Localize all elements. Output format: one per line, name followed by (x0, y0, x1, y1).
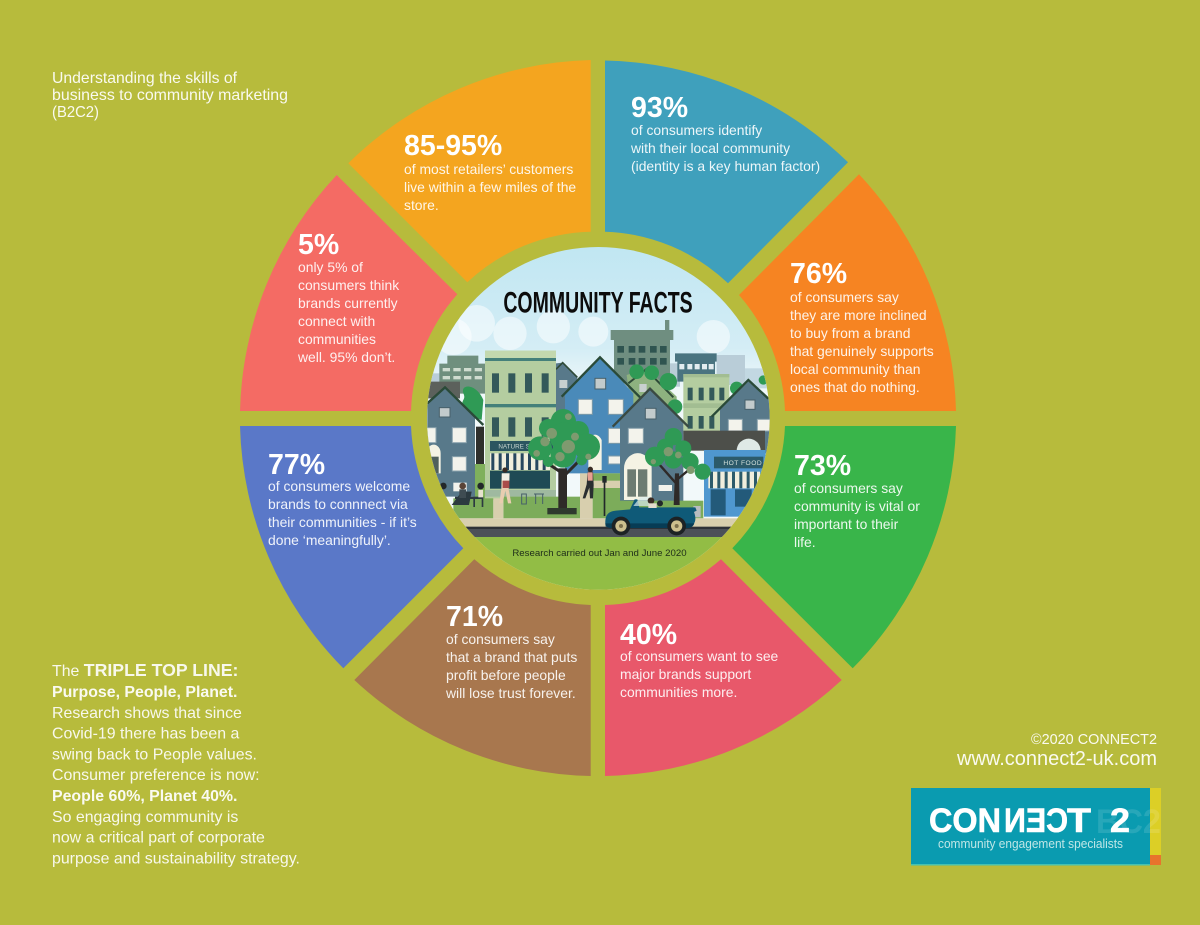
triple top line text block: now a critical part of corporate (52, 830, 265, 846)
panel: 76% inclined to buy: local community than (790, 361, 920, 377)
panel: 76% inclined to buy: to buy from a brand (790, 325, 910, 341)
panel: 71% lose trust: that a brand that puts (446, 649, 577, 665)
triple top line text block: People 60%, Planet 40%. (52, 788, 237, 805)
panel: 71% lose trust: profit before people (446, 667, 566, 683)
triple top line text block: swing back to People values. (52, 746, 257, 764)
panel: 5% connect well: only 5% of (298, 259, 363, 275)
logo: connect2: 2 (1110, 802, 1130, 840)
central town illustration (420, 240, 780, 600)
panel: 76% inclined to buy: that genuinely supports (790, 343, 934, 359)
panel: 76% inclined to buy: of consumers say (790, 289, 899, 305)
triple top line text block: Consumer preference is now: (52, 767, 260, 784)
panel: 73% vital: life. (794, 534, 816, 550)
panel: 71% lose trust: will lose trust forever. (445, 685, 576, 701)
intro text: Understanding the skills of (52, 70, 238, 87)
panel: 40% support communities: 40% (620, 619, 677, 651)
logo: connect2: BC2 (1096, 803, 1161, 841)
research note: Research carried out Jan and June 2020 (512, 548, 687, 558)
panel: 5% connect well: well. 95% don’t. (297, 349, 395, 365)
panel: 73% vital: 73% (794, 450, 851, 482)
triple top line text block: The TRIPLE TOP LINE: (52, 660, 238, 680)
panel: 40% support communities (605, 559, 842, 776)
logo: connect2: CEN (1004, 802, 1068, 840)
panel: 85-95% retailers: of most retailers’ customers (404, 161, 573, 177)
logo: connect2: T (1067, 802, 1091, 840)
panel: 93% identity: (identity is a key human factor) (631, 158, 820, 174)
intro text: business to community marketing (52, 87, 288, 104)
logo: connect2: community engagement specialists (938, 837, 1123, 851)
panel: 5% connect well: consumers think (298, 277, 399, 293)
panel: 40% support communities: of consumers want to see (620, 648, 779, 664)
panel: 5% connect well: connect with (298, 313, 375, 329)
panel: 85-95% retailers: 85-95% (404, 130, 502, 162)
panel: 93% identity: 93% (631, 92, 688, 124)
panel: 73% vital (732, 426, 956, 668)
central town illustration: NATURE S (498, 444, 530, 451)
triple top line text block: Research shows that since (52, 705, 242, 722)
panel: 40% support communities: major brands support (620, 666, 751, 682)
panel: 93% identity: with their local community (630, 140, 790, 156)
panel: 85-95% retailers (348, 60, 591, 282)
panel: 76% inclined to buy: they are more inclined (790, 307, 927, 323)
copyright and website: www.connect2-uk.com (956, 748, 1157, 770)
heading: community facts: COMMUNITY FACTS (503, 287, 693, 320)
panel: 93% identity: of consumers identify (631, 122, 762, 138)
panel: 71% lose trust (354, 559, 591, 776)
panel: 76% inclined to buy: 76% (790, 258, 847, 290)
panel: 5% connect well: communities (298, 331, 376, 347)
intro text: (B2C2) (52, 104, 99, 121)
panel: 85-95% retailers: live within a few miles of the (404, 179, 576, 195)
triple top line text block (52, 660, 300, 868)
panel: 5% connect well (240, 175, 457, 411)
logo: connect2 (911, 788, 1161, 866)
copyright and website (956, 731, 1157, 770)
intro text (52, 70, 288, 121)
panel: 40% support communities: communities more. (620, 684, 737, 700)
panel: 76% inclined to buy (739, 174, 956, 411)
panel: 77% welcome brands: brands to connnect via (268, 496, 408, 512)
panel: 77% welcome brands: done ‘meaningfully’. (268, 532, 391, 548)
panel: 71% lose trust: 71% (446, 601, 503, 633)
panel: 77% welcome brands: their communities - if it’s (268, 514, 417, 530)
panel: 77% welcome brands: 77% (268, 449, 325, 481)
panel: 77% welcome brands (240, 426, 463, 668)
panel: 73% vital: of consumers say (794, 480, 903, 496)
panel: 73% vital: community is vital or (794, 498, 920, 514)
triple top line text block: Covid-19 there has been a (52, 726, 239, 742)
triple top line text block: So engaging community is (52, 809, 238, 826)
panel: 77% welcome brands: of consumers welcome (268, 478, 410, 494)
panel: 85-95% retailers: store. (404, 197, 439, 213)
panel: 5% connect well: 5% (298, 229, 339, 261)
central town illustration: HOT FOOD (723, 460, 762, 467)
logo: connect2: CON (929, 802, 1001, 840)
panel: 76% inclined to buy: ones that do nothing. (790, 379, 920, 395)
copyright and website: ©2020 CONNECT2 (1031, 731, 1157, 748)
panel: 5% connect well: brands currently (298, 295, 398, 311)
triple top line text block: Purpose, People, Planet. (52, 684, 237, 701)
triple top line text block: purpose and sustainability strategy. (52, 850, 300, 868)
panel: 73% vital: important to their (794, 516, 899, 532)
panel: 93% identity (605, 60, 848, 283)
panel: 71% lose trust: of consumers say (446, 631, 555, 647)
